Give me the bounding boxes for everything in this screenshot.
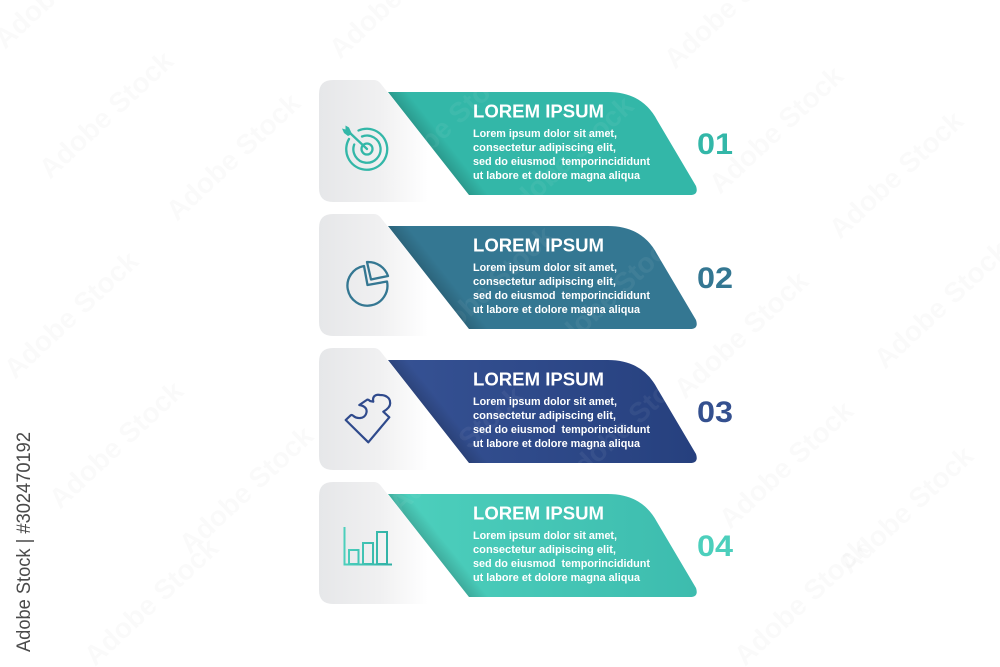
watermark over banners <box>373 55 700 519</box>
icon: pie chart <box>347 262 388 306</box>
watermark over banners: Adobe Stock <box>383 380 530 519</box>
step 2 heading: LOREM IPSUM <box>473 236 604 256</box>
step 1 banner shadow <box>388 92 500 195</box>
step 1 body text: Lorem ipsum dolor sit amet, <box>473 128 617 140</box>
step 3 body text: consectetur adipiscing elit, <box>473 410 616 422</box>
watermark over banners: Adobe Stock <box>553 355 700 494</box>
icon: puzzle piece <box>346 395 390 442</box>
step 1 banner <box>388 92 697 195</box>
step 4 body text: consectetur adipiscing elit, <box>473 544 616 556</box>
step 1 body text <box>473 128 650 182</box>
step 1 body text: consectetur adipiscing elit, <box>473 142 616 154</box>
step 2 banner <box>388 226 697 329</box>
icon: bar chart <box>344 527 392 564</box>
step 4 <box>319 482 733 604</box>
step 4 banner <box>388 494 697 597</box>
step 2 banner shadow <box>388 226 500 329</box>
step 2 body text: sed do eiusmod temporincididunt <box>473 290 650 302</box>
step 3 body text: ut labore et dolore magna aliqua <box>473 438 641 450</box>
step 1 <box>319 80 733 202</box>
step 1 number: 01 <box>697 128 733 161</box>
step 4 number: 04 <box>697 530 733 563</box>
step 4 body text: sed do eiusmod temporincididunt <box>473 558 650 570</box>
step 4 icon panel <box>319 482 469 604</box>
side credit text: Adobe Stock | #302470192 <box>14 432 35 652</box>
step 4 banner shadow <box>388 494 500 597</box>
step 3 body text <box>473 396 650 450</box>
watermark over banners: Adobe Stock <box>373 55 520 194</box>
step 4 heading: LOREM IPSUM <box>473 504 604 524</box>
step 2 number: 02 <box>697 262 733 295</box>
step 3 body text: Lorem ipsum dolor sit amet, <box>473 396 617 408</box>
watermark over banners: Adobe Stock <box>538 225 685 364</box>
step 1 body text: sed do eiusmod temporincididunt <box>473 156 650 168</box>
watermark over banners: Adobe Stock <box>493 90 640 229</box>
step 2 body text: ut labore et dolore magna aliqua <box>473 304 641 316</box>
step 1 body text: ut labore et dolore magna aliqua <box>473 170 641 182</box>
step 2 body text <box>473 262 650 316</box>
step 1 heading: LOREM IPSUM <box>473 102 604 122</box>
step 2 icon panel <box>319 214 469 336</box>
step 2 body text: Lorem ipsum dolor sit amet, <box>473 262 617 274</box>
step 1 icon panel <box>319 80 469 202</box>
step 2 body text: consectetur adipiscing elit, <box>473 276 616 288</box>
step 3 icon panel <box>319 348 469 470</box>
step 3 banner <box>388 360 697 463</box>
icon: target with arrow <box>342 126 387 170</box>
step 4 body text: ut labore et dolore magna aliqua <box>473 572 641 584</box>
step 3 number: 03 <box>697 396 733 429</box>
step 4 body text <box>473 530 650 584</box>
watermark over banners: Adobe Stock <box>413 220 560 359</box>
step 3 banner shadow <box>388 360 500 463</box>
step 3 body text: sed do eiusmod temporincididunt <box>473 424 650 436</box>
step 2 <box>319 214 733 336</box>
step 3 <box>319 348 733 470</box>
step 4 body text: Lorem ipsum dolor sit amet, <box>473 530 617 542</box>
step 3 heading: LOREM IPSUM <box>473 370 604 390</box>
